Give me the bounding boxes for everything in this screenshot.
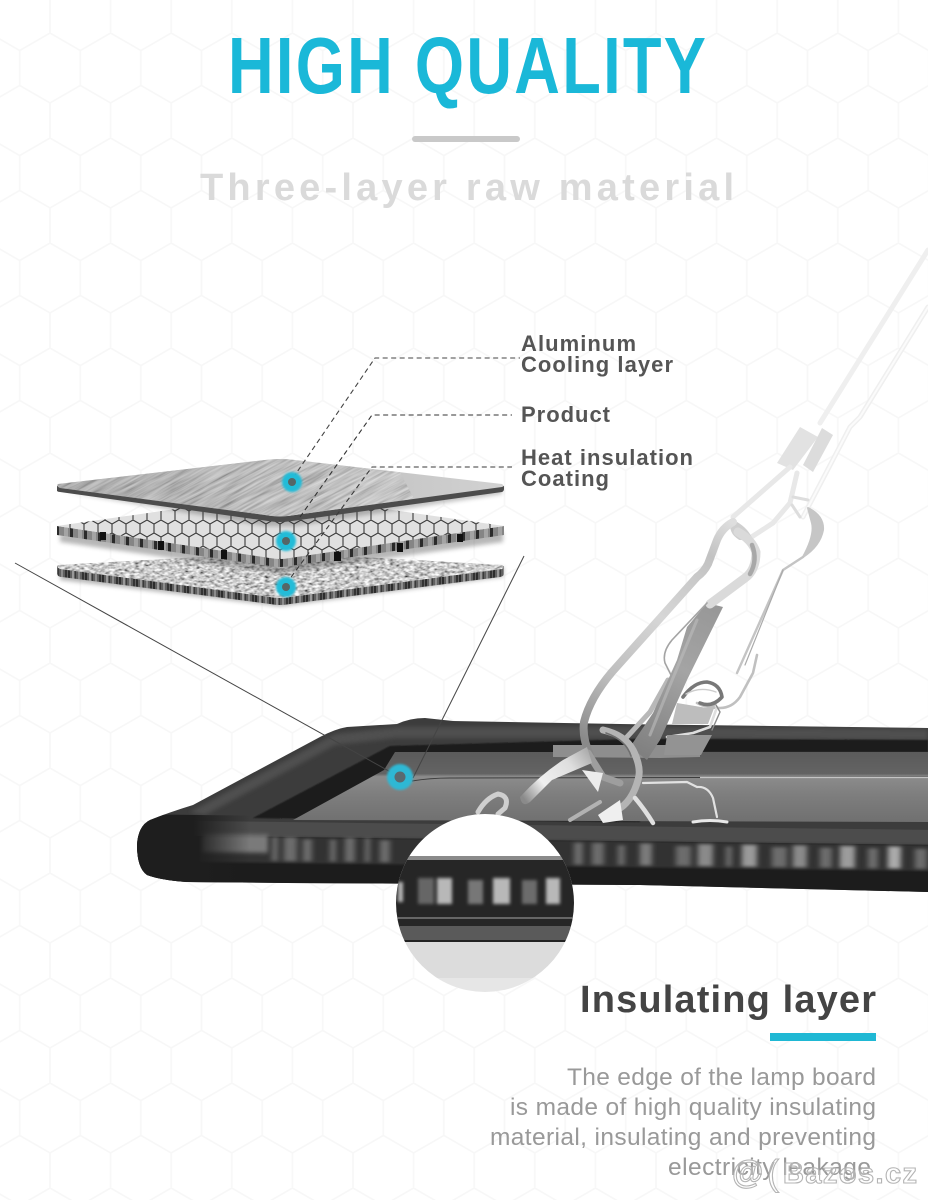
watermark: ( — [767, 1152, 779, 1193]
marker: product dot — [276, 531, 296, 551]
layer: aluminum cooling sheet — [57, 459, 504, 528]
hook outer arm — [584, 522, 733, 755]
marker: coating dot — [276, 577, 296, 597]
marker: board dot — [387, 764, 413, 790]
small link near inset — [478, 794, 506, 814]
ferrule — [777, 427, 818, 470]
watermark: @ — [732, 1154, 763, 1190]
thin pointer line right — [413, 556, 524, 778]
thin outline — [664, 603, 707, 675]
label: aluminum cooling layer: Cooling layer — [521, 352, 673, 377]
lamp board photo — [137, 718, 928, 892]
accent bar — [770, 1033, 876, 1041]
spike links — [520, 747, 592, 804]
edge detail — [407, 856, 563, 860]
leader line: aluminum — [293, 358, 520, 478]
cables — [820, 250, 928, 423]
glass panel — [293, 752, 928, 822]
hook band — [630, 603, 723, 760]
chain rings — [588, 753, 620, 783]
inset zoom circle — [396, 814, 574, 992]
description text: The edge of the lamp board — [567, 1064, 876, 1091]
small link — [792, 497, 808, 517]
description text — [490, 1064, 876, 1181]
upper hook bar — [710, 532, 756, 604]
watermark: Bazos.cz — [783, 1158, 917, 1190]
clip crescent — [803, 508, 823, 557]
layer: honeycomb product — [57, 494, 504, 574]
diagram: three-layer sheets — [57, 358, 520, 609]
clip wire — [737, 557, 803, 673]
label: heat insulation coating — [521, 445, 693, 491]
front edge — [137, 814, 928, 892]
bracket — [553, 745, 700, 758]
description text: material, insulating and preventing — [490, 1124, 876, 1151]
watermark — [732, 1152, 917, 1193]
inner dark edge — [253, 739, 928, 822]
rim shading — [190, 727, 928, 815]
subtitle: Three-layer raw material — [200, 167, 734, 209]
label: product: Product — [521, 402, 611, 427]
description text: electricity leakage — [668, 1154, 871, 1181]
wire loop — [733, 467, 790, 517]
heading: insulating layer: Insulating layer — [580, 979, 876, 1021]
leader line: heat insulation — [286, 467, 512, 584]
label: heat insulation coating: Coating — [521, 466, 609, 491]
ring box — [672, 703, 716, 724]
leader line: product — [300, 415, 512, 517]
divider bar — [412, 136, 520, 142]
small ring — [683, 682, 722, 705]
title: HIGH QUALITY — [228, 22, 706, 111]
label: aluminum cooling layer: Aluminum — [521, 331, 636, 356]
label: aluminum cooling layer — [521, 331, 673, 377]
thin pointer line left — [15, 563, 396, 775]
description text: is made of high quality insulating — [510, 1094, 876, 1121]
reflection — [643, 782, 717, 817]
label: heat insulation coating: Heat insulation — [521, 445, 693, 470]
hook arm left of band — [626, 680, 668, 738]
marker: aluminum dot — [282, 472, 302, 492]
hanging chain and hooks — [478, 250, 928, 823]
layer: heat insulation coating — [55, 550, 507, 606]
